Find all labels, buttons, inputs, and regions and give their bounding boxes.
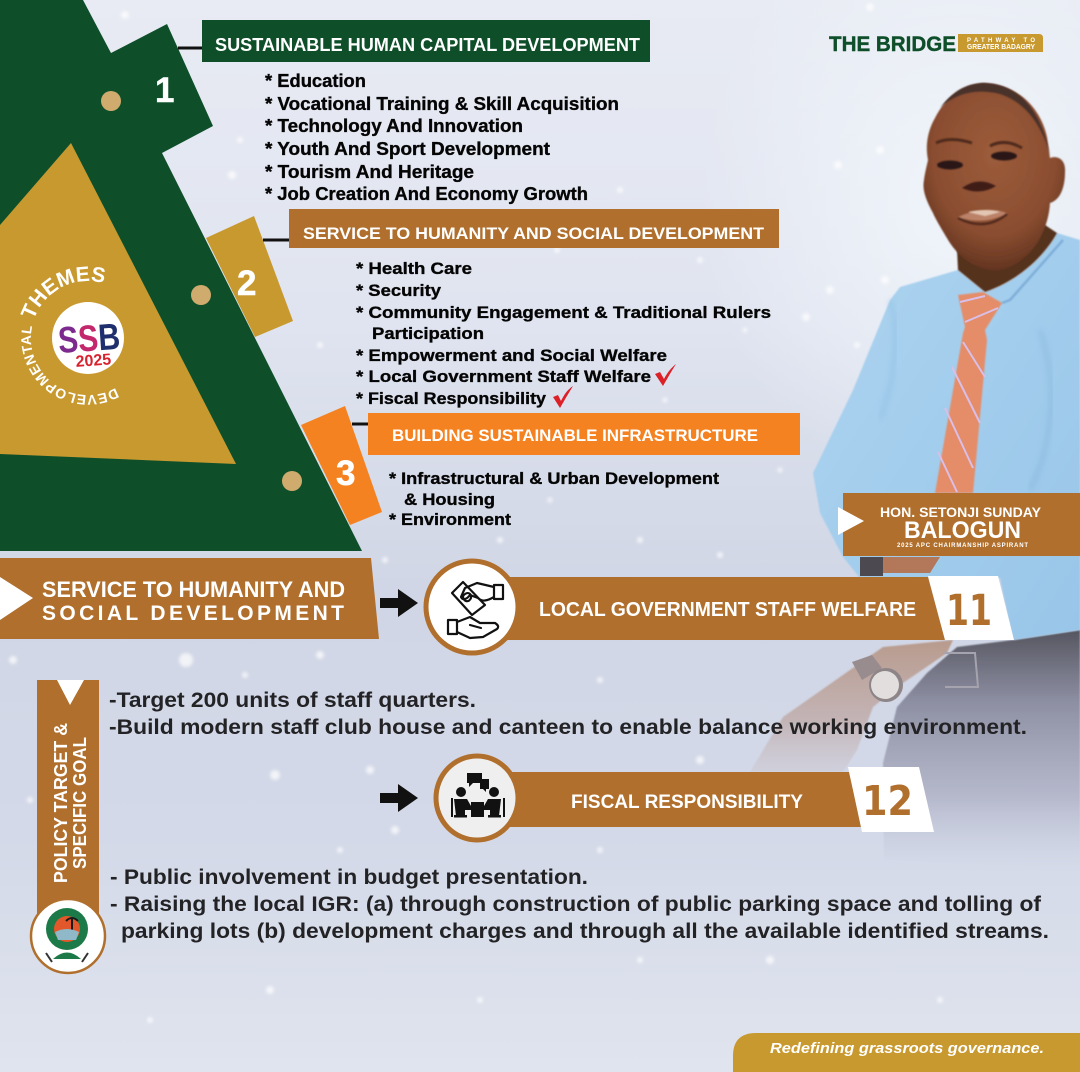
section banner: [0, 558, 379, 639]
number 2 with dot: [191, 264, 256, 305]
policy text for item 12: - Raising the local IGR: (a) through construction of public parking space and tolling of: [110, 893, 1042, 916]
SSB 2025 badge: SSB: [57, 316, 121, 361]
policy side bar: [37, 680, 99, 915]
policy side bar: POLICY TARGET &: [51, 723, 71, 883]
list: theme 2: * Fiscal Responsibility: [356, 389, 547, 408]
red check marks: [553, 364, 676, 408]
list: theme 2: Participation: [372, 324, 484, 343]
icon: meeting around a table: [436, 756, 518, 840]
policy text for item 11: [109, 689, 1027, 739]
name plate: [838, 493, 1080, 556]
slogan tab: [733, 1033, 1080, 1072]
policy text for item 12: parking lots (b) development charges and through all the available identified streams.: [121, 920, 1049, 943]
number 1 with dot: 1: [155, 71, 174, 110]
slogan tab: Redefining grassroots governance.: [770, 1040, 1044, 1057]
list: theme 1: * Education: [265, 71, 366, 91]
curved label: DEVELOPMENTAL: [21, 326, 119, 405]
list: theme 1: * Technology And Innovation: [265, 116, 523, 136]
list: theme 2: * Security: [356, 281, 442, 300]
name plate: HON. SETONJI SUNDAY: [880, 504, 1042, 520]
list: theme 2: * Empowerment and Social Welfare: [356, 346, 667, 365]
brand: the bridge: THE BRIDGE: [829, 33, 956, 56]
heading: sustainable human capital: SUSTAINABLE HUMAN CAPITAL DEVELOPMENT: [215, 35, 640, 55]
tab 2: [206, 216, 293, 337]
bar: item 11: [500, 576, 1014, 640]
section banner: SERVICE TO HUMANITY AND: [42, 577, 345, 602]
faded lower body: [750, 630, 1080, 870]
policy text for item 12: - Public involvement in budget presentation.: [110, 866, 588, 889]
SSB 2025 badge: [52, 302, 124, 374]
gold triangle panel: [0, 143, 236, 464]
list: theme 2: * Local Government Staff Welfare: [356, 367, 651, 386]
brand: the bridge: PATHWAY TO: [967, 38, 1035, 44]
number 3 with dot: [282, 454, 355, 493]
policy text for item 11: -Build modern staff club house and canteen to enable balance working environment.: [109, 716, 1027, 739]
local government logo: [31, 899, 105, 973]
name plate: BALOGUN: [904, 517, 1021, 544]
hair: [940, 83, 1050, 155]
bar: item 12: FISCAL RESPONSIBILITY: [571, 792, 803, 813]
list: theme 3: & Housing: [404, 490, 495, 509]
list: theme 1: * Tourism And Heritage: [265, 162, 474, 182]
number 1 with dot: [101, 71, 174, 111]
portrait of candidate: [750, 83, 1080, 870]
list: theme 1: * Vocational Training & Skill Acquisition: [265, 94, 619, 114]
brand: the bridge: [829, 33, 1043, 56]
number 2 with dot: 2: [237, 264, 256, 303]
facial features: [936, 140, 1022, 224]
section banner: SOCIAL DEVELOPMENT: [42, 602, 344, 625]
heading: building sustainable infrastructure: BUILDING SUSTAINABLE INFRASTRUCTURE: [392, 426, 758, 445]
heading: service to humanity: SERVICE TO HUMANITY AND SOCIAL DEVELOPMENT: [303, 224, 765, 243]
policy text for item 12: [110, 866, 1049, 943]
curved label: [20, 266, 119, 405]
main green tree shape: [0, 0, 362, 551]
arrow to item 12: [380, 784, 418, 812]
list: theme 1: * Youth And Sport Development: [265, 139, 550, 159]
list: theme 1: [265, 71, 619, 204]
bar: item 11: LOCAL GOVERNMENT STAFF WELFARE: [539, 599, 916, 621]
tab 3: [301, 406, 382, 525]
connector lines: [178, 48, 368, 424]
policy text for item 11: -Target 200 units of staff quarters.: [109, 689, 476, 712]
bar: item 12: 12: [862, 777, 913, 825]
shirt: [813, 233, 1080, 640]
list: theme 2: [356, 259, 771, 408]
list: theme 3: * Environment: [389, 510, 511, 529]
bar: item 11: 11: [946, 586, 992, 636]
bar: item 12: [500, 767, 934, 832]
head: [923, 83, 1065, 270]
list: theme 1: * Job Creation And Economy Growth: [265, 184, 588, 204]
curved label: THEMES: [20, 266, 105, 316]
heading: sustainable human capital: [202, 20, 650, 62]
list: theme 3: [389, 469, 719, 529]
tie: [935, 292, 1002, 493]
icon: hands exchanging money: [426, 561, 518, 653]
brand: the bridge: GREATER BADAGRY: [967, 44, 1035, 51]
name plate: 2025 APC CHAIRMANSHIP ASPIRANT: [897, 543, 1028, 549]
heading: service to humanity: [289, 209, 779, 248]
arrow to item 11: [380, 589, 418, 617]
neck: [957, 225, 1057, 292]
policy side bar: SPECIFIC GOAL: [70, 737, 90, 869]
number 3 with dot: 3: [336, 454, 355, 493]
heading: building sustainable infrastructure: [368, 413, 800, 455]
SSB 2025 badge: 2025: [75, 351, 112, 371]
list: theme 2: * Health Care: [356, 259, 472, 278]
list: theme 3: * Infrastructural & Urban Development: [389, 469, 719, 488]
list: theme 2: * Community Engagement & Traditional Rulers: [356, 303, 771, 322]
